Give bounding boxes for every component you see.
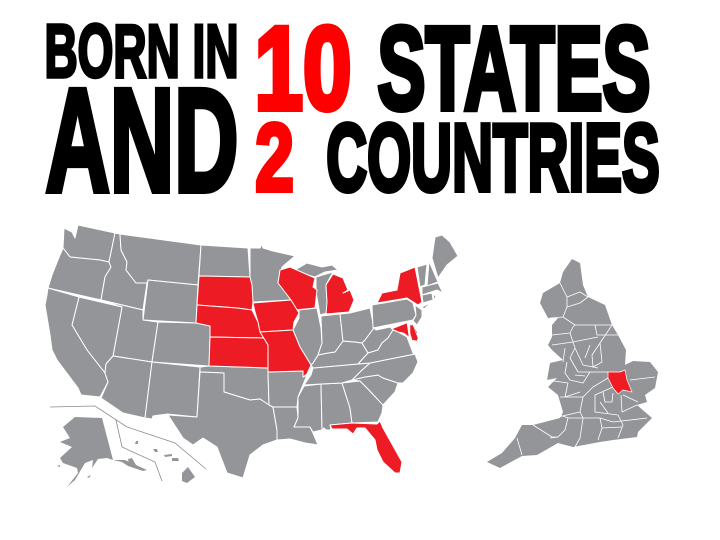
heading: 2: 2 <box>255 104 294 212</box>
map: Alaska and Hawaii inset <box>50 406 206 487</box>
map: England <box>487 259 658 468</box>
heading: born in: BORN IN <box>44 9 238 93</box>
heading: 10: 10 <box>254 3 352 135</box>
map: United States <box>45 225 458 478</box>
highlighted county: Cambridgeshire <box>608 370 632 394</box>
county borders <box>517 283 655 455</box>
heading: and: AND <box>46 59 238 223</box>
title <box>44 3 660 223</box>
